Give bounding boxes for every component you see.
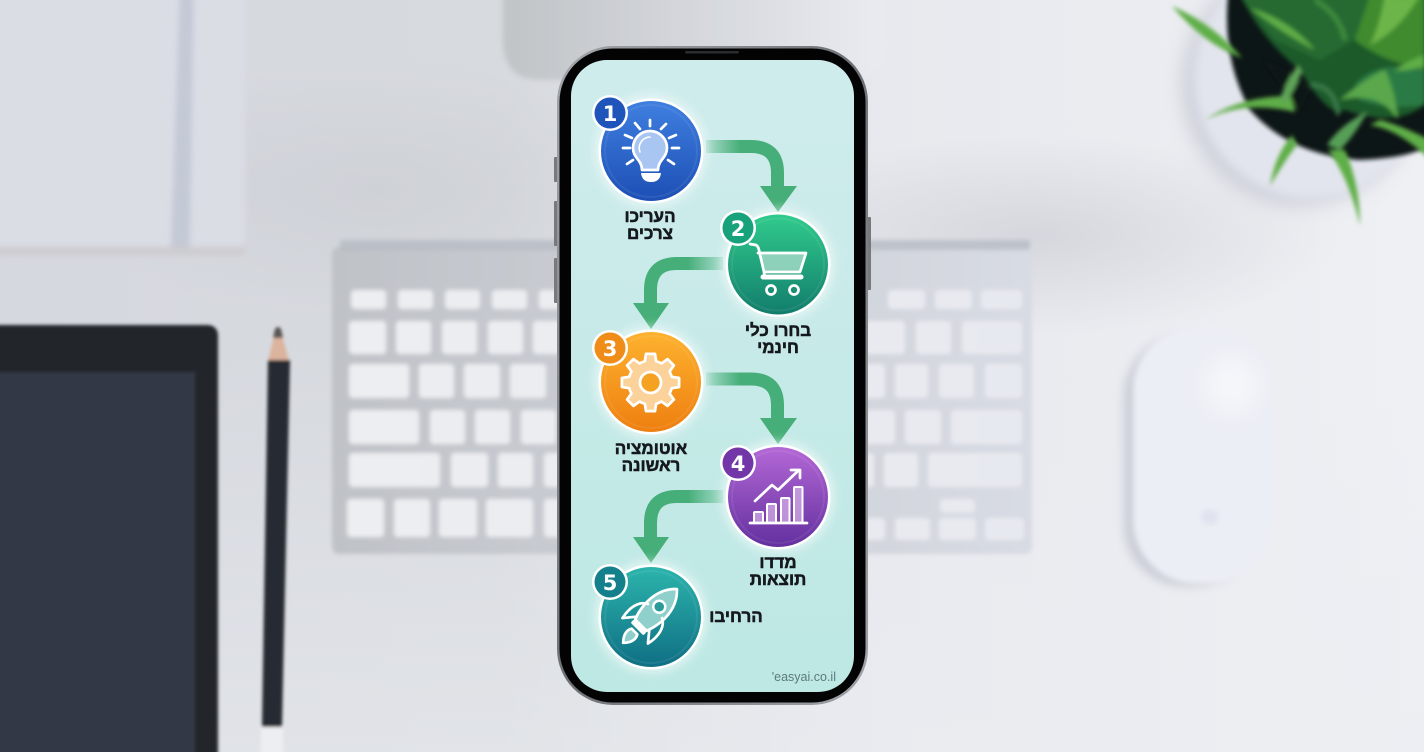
icon: growth chart <box>750 470 807 523</box>
badge 3: 3 <box>603 337 617 361</box>
tablet <box>0 325 218 752</box>
label step 1 <box>624 207 676 243</box>
phone <box>554 46 871 705</box>
badge 2: 2 <box>731 217 745 241</box>
speaker <box>685 51 739 54</box>
screen <box>571 60 854 692</box>
badge 5: 5 <box>603 571 617 595</box>
label step 1: העריכו <box>624 207 676 226</box>
arrow 2 <box>633 264 723 329</box>
pencil <box>261 327 290 752</box>
keyboard <box>332 240 1032 554</box>
step 4 node <box>720 441 834 553</box>
label step 1: צרכים <box>627 224 673 243</box>
step 1 node <box>592 95 707 207</box>
label step 4: תוצאות <box>750 570 806 589</box>
step 3 node <box>592 326 707 438</box>
icon: shopping cart <box>750 244 806 294</box>
label step 4: מדדו <box>759 553 797 572</box>
label step 2 <box>745 321 811 357</box>
icon: rocket <box>610 576 690 656</box>
icon: gear <box>622 354 679 411</box>
phone body <box>557 46 868 705</box>
plant <box>1172 0 1424 226</box>
label step 3: ראשונה <box>622 456 680 475</box>
badge 4: 4 <box>731 452 745 476</box>
arrow 4 <box>633 496 723 563</box>
step 5 node <box>592 561 707 673</box>
label step 3: אוטומציה <box>615 439 688 458</box>
label step 5: הרחיבו <box>709 607 763 626</box>
label step 3 <box>615 439 688 475</box>
arrow 1 <box>706 146 797 212</box>
arrow 3 <box>706 379 797 444</box>
step 2 node <box>720 208 834 320</box>
mouse <box>1124 326 1275 586</box>
watermark: 'easyai.co.il <box>772 670 836 684</box>
badge 1: 1 <box>603 102 617 126</box>
top centre object <box>503 0 885 80</box>
label step 2: חינמי <box>757 338 799 357</box>
notebook <box>0 0 245 255</box>
label step 2: בחרו כלי <box>745 321 811 340</box>
icon: light bulb <box>623 120 679 182</box>
side buttons <box>554 157 871 303</box>
label step 4 <box>750 553 806 589</box>
